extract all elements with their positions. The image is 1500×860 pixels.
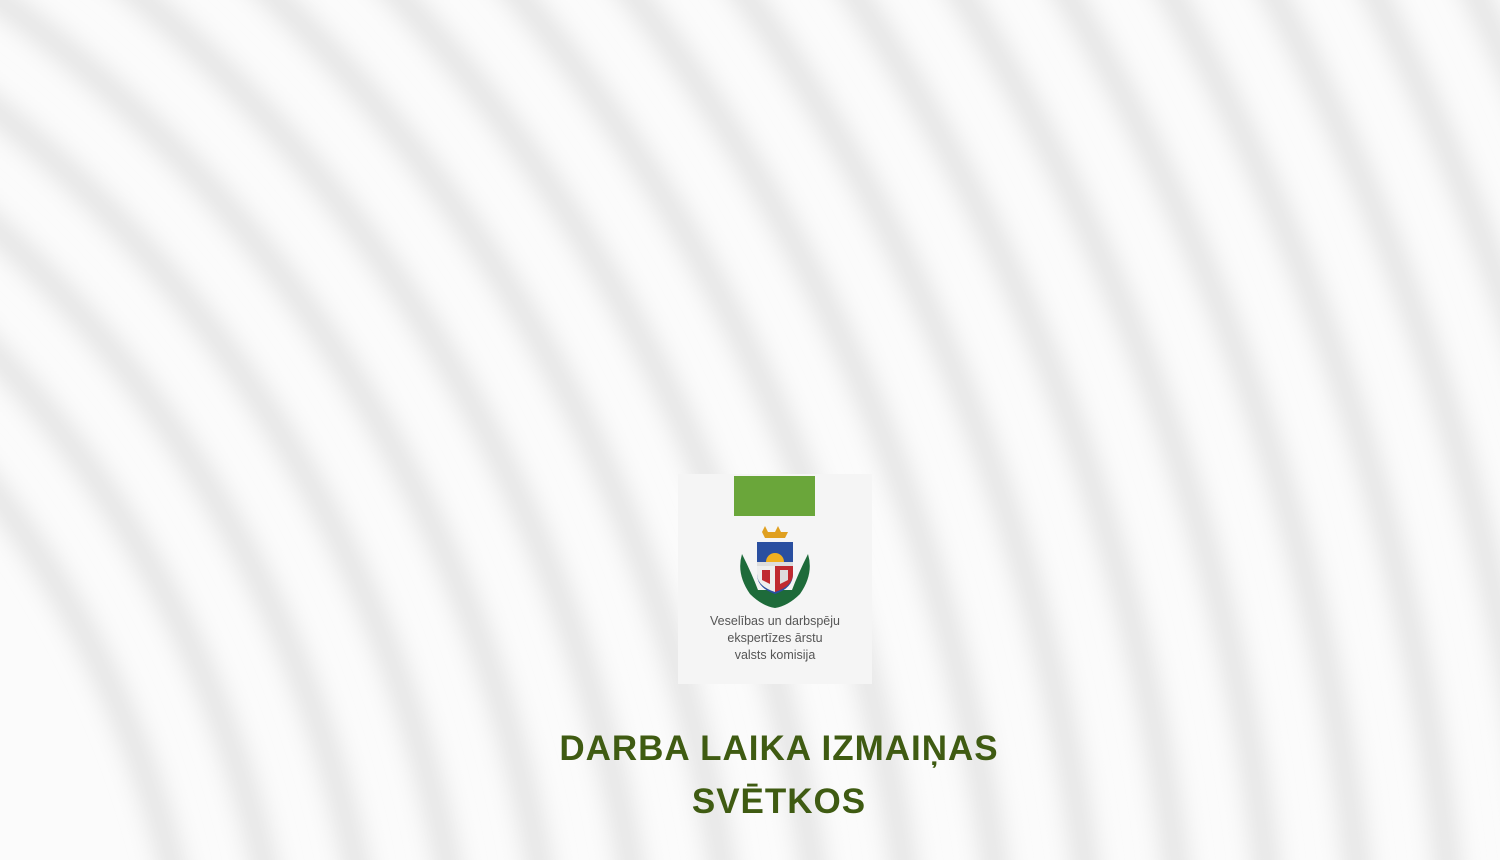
logo text: ekspertīzes ārstu [727, 631, 823, 645]
icon: coat of arms [740, 526, 810, 608]
title: DARBA LAIKA IZMAIŅAS [559, 729, 999, 768]
logo text [710, 614, 840, 662]
green bar [734, 476, 815, 516]
logo text: valsts komisija [735, 648, 815, 662]
title: SVĒTKOS [692, 782, 866, 821]
logo block [678, 474, 872, 684]
title [559, 729, 999, 821]
logo text: Veselības un darbspēju [710, 614, 840, 628]
